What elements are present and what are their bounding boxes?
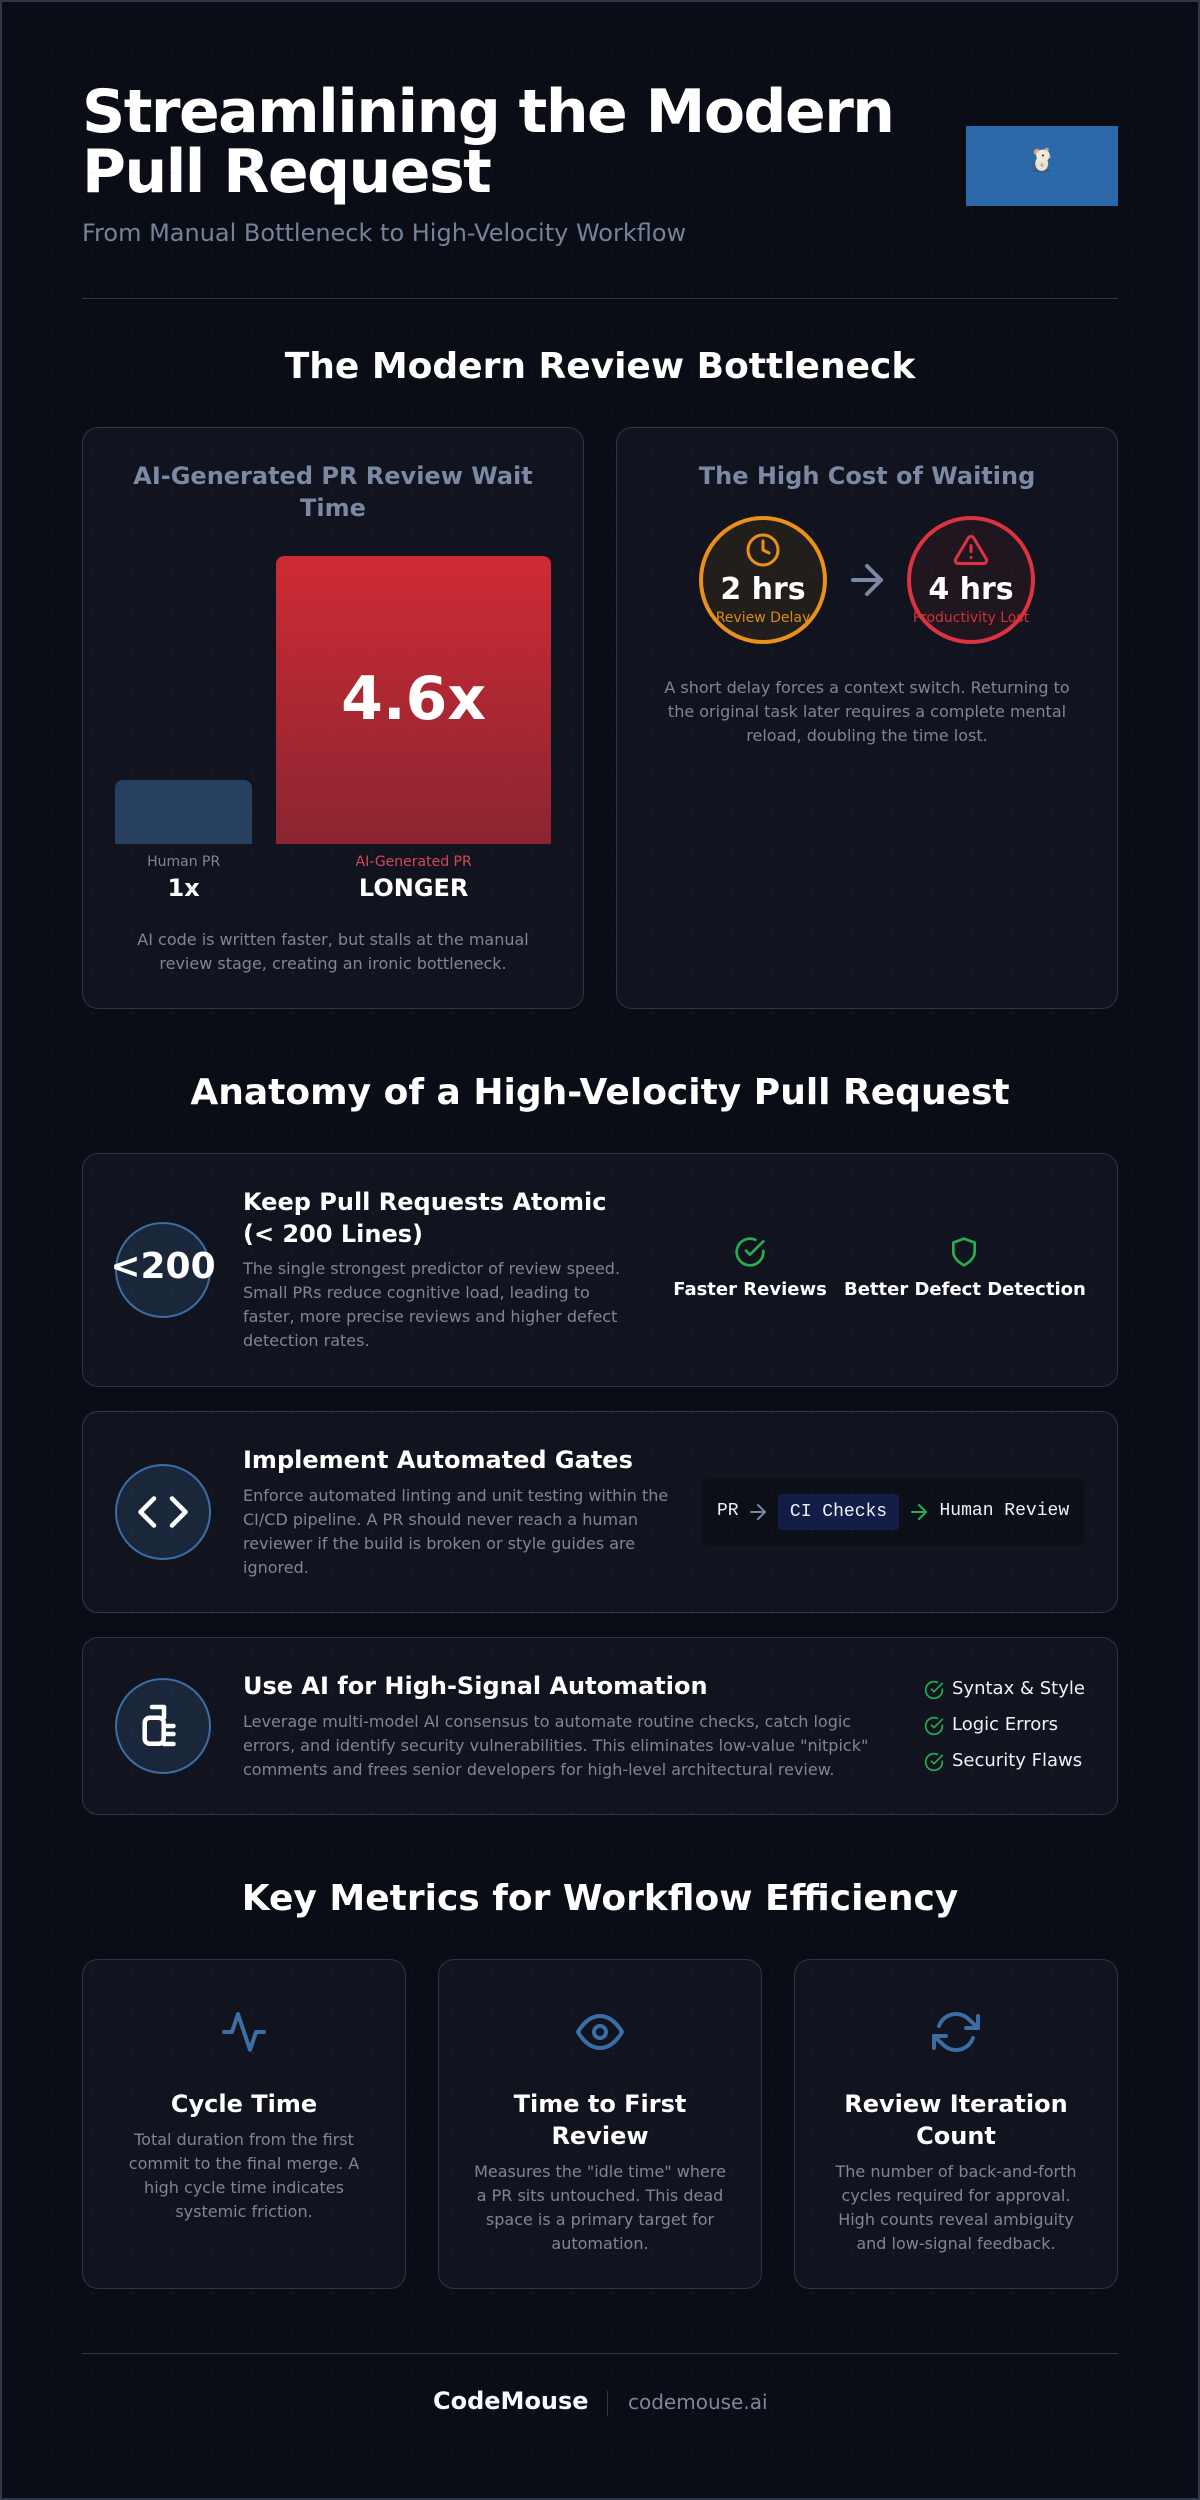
metric description: cycles required for approval. [842, 2186, 1070, 2205]
panel: keep pull requests atomic [82, 1153, 1118, 1387]
step: CI checks [778, 1494, 899, 1530]
metric description: automation. [551, 2234, 649, 2253]
panel: the high cost of waiting [616, 427, 1118, 1009]
card description: detection rates. [243, 1331, 370, 1350]
benefit: better defect detection: Better Defect Detection [844, 1279, 1086, 1300]
icon: shield [952, 1237, 976, 1267]
heading: key metrics: Key Metrics for Workflow Efficiency [242, 1878, 958, 1919]
metric heading: Cycle Time [171, 2090, 317, 2118]
panel heading: The High Cost of Waiting [699, 462, 1035, 490]
footer separator [607, 2391, 608, 2416]
card heading: (< 200 Lines) [243, 1220, 423, 1248]
icon: clock [746, 534, 780, 566]
icon: check syntax [924, 1680, 944, 1700]
metric heading [844, 2090, 1068, 2150]
footer brand: CodeMouse [433, 2387, 589, 2415]
metric description: and low-signal feedback. [856, 2234, 1056, 2253]
footer url: codemouse.ai [628, 2390, 768, 2414]
card description: Small PRs reduce cognitive load, leading to [243, 1283, 590, 1302]
card description: errors, and identify security vulnerabilities. This eliminates low-value "nitpick" [243, 1736, 868, 1755]
check item: security flaws: Security Flaws [952, 1750, 1082, 1771]
panel description: A short delay forces a context switch. Returning to [664, 678, 1070, 697]
panel description [664, 678, 1070, 745]
card description: comments and frees senior developers for high-level architectural review. [243, 1760, 834, 1779]
panel heading: Time [300, 494, 366, 522]
badge circle [115, 1678, 211, 1774]
card description [243, 1712, 868, 1779]
metric description [129, 2130, 359, 2221]
metric description: High counts reveal ambiguity [838, 2210, 1074, 2229]
icon: check security [924, 1752, 944, 1772]
panel: time to first review [438, 1959, 762, 2289]
label: human PR: Human PR [147, 854, 220, 870]
metric heading: Time to First [514, 2090, 686, 2118]
title: Streamlining the Modern [82, 77, 894, 147]
metric description: The number of back-and-forth [836, 2162, 1076, 2181]
panel description: review stage, creating an ironic bottleneck. [159, 954, 507, 973]
panel: use AI for high-signal automation [82, 1637, 1118, 1815]
panel: implement automated gates [82, 1411, 1118, 1613]
panel heading [133, 462, 533, 522]
metric heading: Review Iteration [844, 2090, 1068, 2118]
metric description: systemic friction. [175, 2202, 313, 2221]
metric description: Measures the "idle time" where [474, 2162, 726, 2181]
circle: review delay [699, 516, 827, 644]
label: productivity lost: Productivity Lost [913, 610, 1029, 626]
card description: The single strongest predictor of review speed. [243, 1259, 620, 1278]
heading: the modern review bottleneck: The Modern Review Bottleneck [285, 346, 915, 387]
metric description: high cycle time indicates [144, 2178, 344, 2197]
card description: CI/CD pipeline. A PR should never reach a human [243, 1510, 638, 1529]
card heading: Implement Automated Gates [243, 1446, 633, 1474]
icon: code brackets [138, 1496, 188, 1528]
title: Pull Request [82, 137, 490, 207]
arrow: delay to productivity lost [851, 564, 884, 596]
panel description: the original task later requires a complete mental [668, 702, 1066, 721]
icon: refresh [932, 2012, 980, 2052]
value: 4 hrs: 4 hrs [928, 572, 1014, 607]
card description: faster, more precise reviews and higher defect [243, 1307, 617, 1326]
step: PR: PR [717, 1501, 739, 1521]
bar value: 4.6x: 4.6x [341, 664, 486, 734]
card description: Leverage multi-model AI consensus to automate routine checks, catch logic [243, 1712, 851, 1731]
panel: AI-generated PR review wait time [82, 427, 584, 1009]
step: CI checks: CI Checks [790, 1502, 887, 1522]
badge value: <200: <200 [110, 1246, 216, 1287]
metric description: space is a primary target for [486, 2210, 714, 2229]
label: review delay: Review Delay [716, 610, 810, 626]
badge circle [115, 1222, 211, 1318]
arrow: CI to human review [911, 1504, 927, 1520]
step: human review: Human Review [940, 1501, 1069, 1521]
pipeline diagram [702, 1478, 1084, 1546]
icon: warning triangle [954, 534, 988, 565]
metric description [474, 2162, 726, 2253]
bar: AI-generated PR [276, 556, 551, 844]
metric heading: Review [551, 2122, 649, 2150]
title [82, 77, 894, 207]
card heading: Use AI for High-Signal Automation [243, 1672, 708, 1700]
metric description: Total duration from the first [134, 2130, 354, 2149]
value: 2 hrs: 2 hrs [720, 572, 806, 607]
header divider [82, 298, 1118, 299]
card description: Enforce automated linting and unit testing within the [243, 1486, 668, 1505]
mouse logo image [966, 126, 1118, 206]
metric heading [514, 2090, 686, 2150]
value: 1x: 1x [168, 874, 200, 902]
icon: bot glyph [142, 1704, 176, 1746]
metric heading: Count [916, 2122, 996, 2150]
icon: check circle [735, 1237, 765, 1267]
metric description: a PR sits untouched. This dead [477, 2186, 723, 2205]
footer divider [82, 2353, 1118, 2354]
panel description: AI code is written faster, but stalls at the manual [137, 930, 529, 949]
panel heading: AI-Generated PR Review Wait [133, 462, 533, 490]
panel: cycle time [82, 1959, 406, 2289]
badge circle [115, 1464, 211, 1560]
subtitle: From Manual Bottleneck to High-Velocity Workflow [82, 219, 686, 247]
card description: reviewer if the build is broken or style guides are [243, 1534, 635, 1553]
arrow: PR to CI [750, 1504, 766, 1520]
circle: productivity lost [907, 516, 1035, 644]
panel description [137, 930, 529, 973]
value: longer: LONGER [359, 874, 468, 902]
icon: check logic [924, 1716, 944, 1736]
card heading [243, 1188, 606, 1248]
card heading: Keep Pull Requests Atomic [243, 1188, 606, 1216]
card description: ignored. [243, 1558, 309, 1577]
card description [243, 1486, 668, 1577]
check item: syntax and style: Syntax & Style [952, 1678, 1085, 1699]
bar: human PR [115, 780, 252, 844]
label: AI-generated PR: AI-Generated PR [356, 854, 472, 870]
card description [242, 1259, 620, 1350]
metric description [835, 2162, 1076, 2253]
panel description: reload, doubling the time lost. [746, 726, 988, 745]
icon: eye [576, 2014, 624, 2050]
panel: review iteration count [794, 1959, 1118, 2289]
benefit: faster reviews: Faster Reviews [673, 1279, 827, 1300]
icon: activity pulse [222, 2012, 266, 2052]
heading: anatomy of a high-velocity pull request: Anatomy of a High-Velocity Pull Request [190, 1072, 1010, 1113]
metric description: commit to the final merge. A [129, 2154, 359, 2173]
check item: logic errors: Logic Errors [952, 1714, 1058, 1735]
